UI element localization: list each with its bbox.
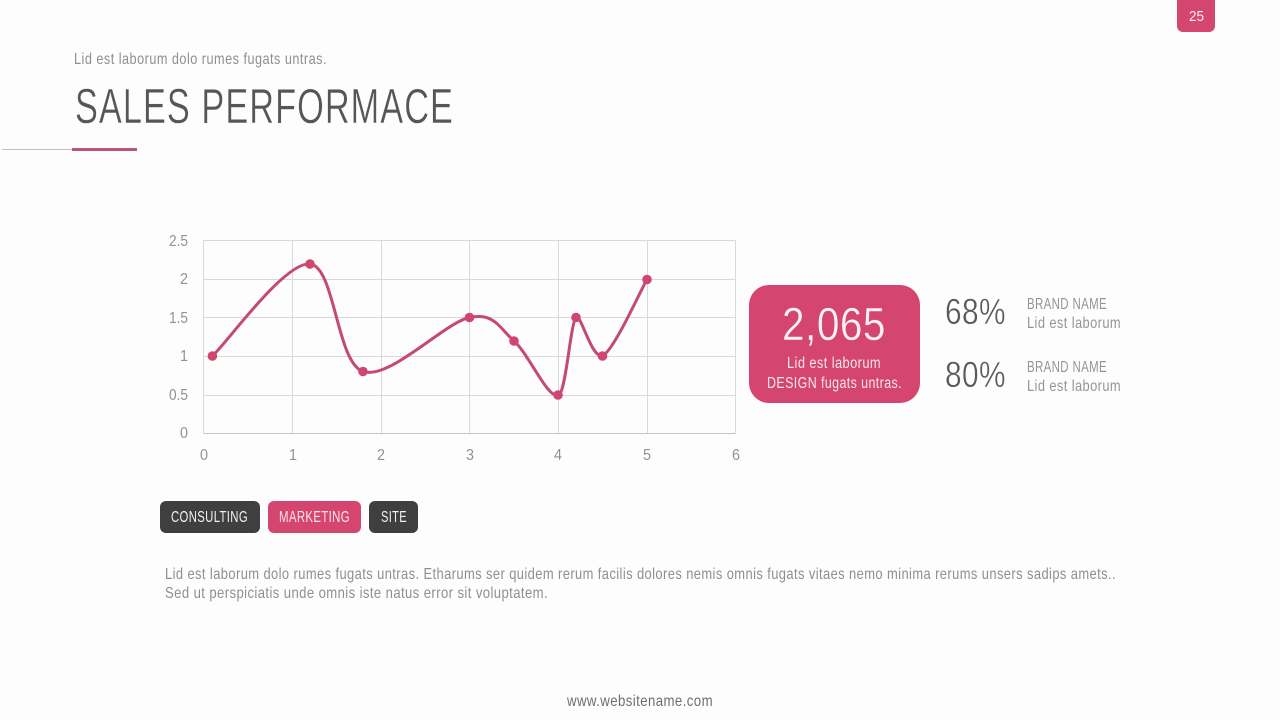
button: consulting — [160, 501, 260, 533]
page number badge — [1177, 0, 1215, 32]
y axis labels: 1 — [180, 348, 188, 365]
stat: 68 percent brand: BRAND NAME — [1027, 296, 1107, 313]
button: site — [369, 501, 418, 533]
chart grid — [204, 240, 736, 434]
x axis labels: 2 — [377, 447, 385, 464]
subtitle: Lid est laborum dolo rumes fugats untras. — [74, 51, 327, 68]
x axis labels: 0 — [200, 447, 208, 464]
x axis labels: 4 — [554, 447, 562, 464]
panel: headline stat: DESIGN fugats untras. — [767, 375, 902, 392]
y axis labels: 0.5 — [169, 387, 188, 404]
button: marketing — [268, 501, 361, 533]
stat: 68 percent brand: Lid est laborum — [1027, 315, 1121, 332]
stat: 80 percent brand: BRAND NAME — [1027, 359, 1107, 376]
data points — [208, 259, 652, 400]
button: marketing: MARKETING — [279, 509, 350, 526]
panel: headline stat: Lid est laborum — [787, 355, 881, 372]
stat: 68 percent brand — [945, 291, 1121, 332]
y axis labels: 2 — [180, 271, 188, 288]
y axis labels: 0 — [180, 425, 188, 442]
panel: headline stat: 2,065 — [782, 298, 886, 350]
x axis labels — [200, 447, 740, 464]
stat: 80 percent brand: 80% — [945, 354, 1006, 395]
line chart — [169, 233, 740, 464]
body paragraph — [165, 566, 1116, 602]
body paragraph: Sed ut perspiciatis unde omnis iste natus error sit voluptatem. — [165, 585, 548, 602]
x axis labels: 1 — [289, 447, 297, 464]
x axis labels: 5 — [643, 447, 651, 464]
button: consulting: CONSULTING — [171, 509, 248, 526]
y axis labels — [169, 233, 188, 442]
y axis labels: 2.5 — [169, 233, 188, 250]
stat: 68 percent brand: 68% — [945, 291, 1006, 332]
stat: 80 percent brand: Lid est laborum — [1027, 378, 1121, 395]
x axis labels: 3 — [466, 447, 474, 464]
y axis labels: 1.5 — [169, 310, 188, 327]
stat: 80 percent brand — [945, 354, 1121, 395]
x axis labels: 6 — [732, 447, 740, 464]
title underline — [2, 148, 137, 151]
page number badge: 25 — [1189, 8, 1204, 25]
button: site: SITE — [381, 509, 407, 526]
sales line — [212, 264, 647, 395]
panel: headline stat — [749, 285, 920, 403]
title: SALES PERFORMACE — [75, 80, 454, 134]
footer website: www.websitename.com — [566, 693, 713, 710]
